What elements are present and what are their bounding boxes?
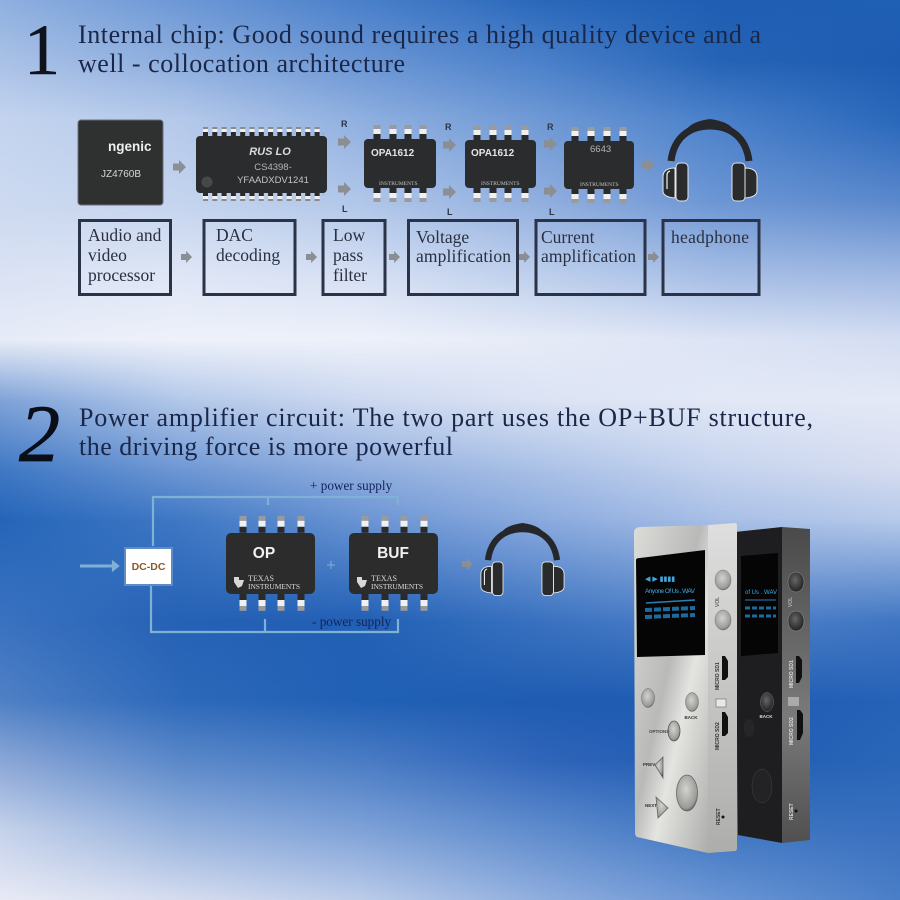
player: silver unit: NEXT [645, 803, 657, 808]
player: silver unit: PREV [643, 762, 655, 767]
box: current amplification [536, 220, 645, 294]
player: silver unit: MICRO SD2 [715, 722, 721, 750]
chip: BUF: TEXAS [371, 574, 397, 583]
arrows after DAC with R and L labels: L [342, 204, 348, 214]
box: current amplification: Current [541, 227, 595, 247]
label: negative power supply: - power supply [312, 614, 392, 629]
box: voltage amplification [408, 220, 518, 294]
chip: OPA1612 low pass [364, 125, 436, 202]
numeral 1: 1 [24, 10, 60, 90]
box: low pass filter [323, 220, 385, 294]
box: low pass filter: pass [333, 245, 363, 265]
player: silver unit: MICRO SD1 [715, 662, 721, 690]
heading 1: Internal chip: Good sound requires a high quality device and a [78, 20, 761, 49]
box: low pass filter: Low [333, 225, 365, 245]
box: DAC decoding: DAC [216, 225, 253, 245]
plus sign [327, 561, 335, 569]
arrows after first OPA1612 with R and L labels: R [445, 122, 452, 132]
icon: headphones [481, 523, 564, 596]
arrow [519, 251, 530, 263]
power supply wiring [80, 497, 398, 632]
player: black unit: VOL [788, 597, 794, 607]
arrows after second OPA1612 with R and L labels: R [547, 122, 554, 132]
box: voltage amplification: Voltage [416, 227, 469, 247]
arrow [181, 251, 192, 263]
chip: BUF: INSTRUMENTS [371, 582, 423, 591]
box: headphone [663, 220, 759, 294]
box: audio and video processor: Audio and [88, 225, 162, 245]
chip: 6643 current [564, 127, 634, 203]
arrows after DAC with R and L labels: R [341, 119, 348, 129]
chip: 6643 current: 6643 [590, 144, 611, 155]
box: DAC decoding: decoding [216, 245, 280, 265]
chip: OP [226, 516, 315, 611]
player: silver unit [634, 523, 737, 853]
chip: OP: OP [253, 545, 275, 562]
heading 1: well - collocation architecture [78, 49, 405, 78]
box: voltage amplification: amplification [416, 246, 511, 266]
arrow [173, 160, 186, 174]
heading 2 [79, 403, 813, 461]
chip: OPA1612 low pass: OPA1612 [371, 148, 415, 159]
heading 1 [78, 20, 761, 78]
box: audio and video processor: video [88, 245, 127, 265]
chip: BUF: BUF [377, 545, 409, 562]
heading 2: the driving force is more powerful [79, 432, 453, 461]
chip: OPA1612 voltage: OPA1612 [471, 148, 515, 159]
chip: audio and video processor [78, 120, 163, 205]
box: low pass filter: filter [333, 265, 367, 285]
arrow [389, 251, 400, 263]
player: black unit: MICRO SD1 [789, 660, 795, 688]
arrows after second OPA1612 with R and L labels [544, 122, 557, 217]
player: black unit [735, 527, 810, 843]
player: silver unit: ◀ ▶ ▮▮▮▮ [645, 576, 675, 583]
numeral 2: 2 [19, 388, 60, 479]
chip: OP: INSTRUMENTS [248, 582, 300, 591]
arrow [306, 251, 317, 263]
chip: audio and video processor: JZ4760B [101, 169, 141, 180]
chip: DAC: RUS LO [249, 146, 291, 158]
DC-DC converter box [125, 548, 172, 585]
chip: OPA1612 voltage [465, 126, 536, 202]
box: audio and video processor [80, 220, 170, 294]
chip: DAC [196, 128, 327, 200]
box: headphone: headphone [671, 227, 749, 247]
player: silver unit: RESET [716, 808, 722, 825]
player: silver unit: OPTIONS [649, 729, 669, 734]
player: black unit: BACK [760, 714, 773, 719]
label: positive power supply: + power supply [310, 478, 393, 493]
chip: OP: TEXAS [248, 574, 274, 583]
arrow [642, 158, 655, 172]
arrows after DAC with R and L labels [338, 119, 351, 214]
box: current amplification: amplification [541, 246, 636, 266]
player: silver unit: BACK [684, 715, 698, 720]
chip: audio and video processor: ngenic [108, 139, 152, 154]
player: black unit: MICRO SD2 [789, 717, 795, 745]
chip: OPA1612 voltage: INSTRUMENTS [481, 181, 520, 187]
chip: DAC: CS4398- [254, 162, 292, 173]
player: silver unit: Anyone Of Us . WAV [645, 588, 696, 595]
arrows after first OPA1612 with R and L labels [443, 122, 456, 217]
arrows after second OPA1612 with R and L labels: L [549, 207, 555, 217]
arrow [648, 251, 659, 263]
player: black unit: RESET [789, 803, 795, 820]
DC-DC converter box: DC-DC [132, 561, 166, 573]
heading 2: Power amplifier circuit: The two part uses the OP+BUF structure, [79, 403, 813, 432]
chip: OPA1612 low pass: INSTRUMENTS [379, 181, 418, 187]
chip: BUF [349, 516, 438, 611]
player: silver unit: VOL [715, 597, 721, 607]
arrows after first OPA1612 with R and L labels: L [447, 207, 453, 217]
box: DAC decoding [204, 220, 295, 294]
arrow [462, 558, 473, 570]
chip: 6643 current: INSTRUMENTS [580, 182, 619, 188]
box: audio and video processor: processor [88, 265, 155, 285]
icon: headphones [663, 119, 757, 201]
player: black unit: of Us . WAV [745, 590, 777, 596]
chip: DAC: YFAADXDV1241 [237, 175, 309, 186]
